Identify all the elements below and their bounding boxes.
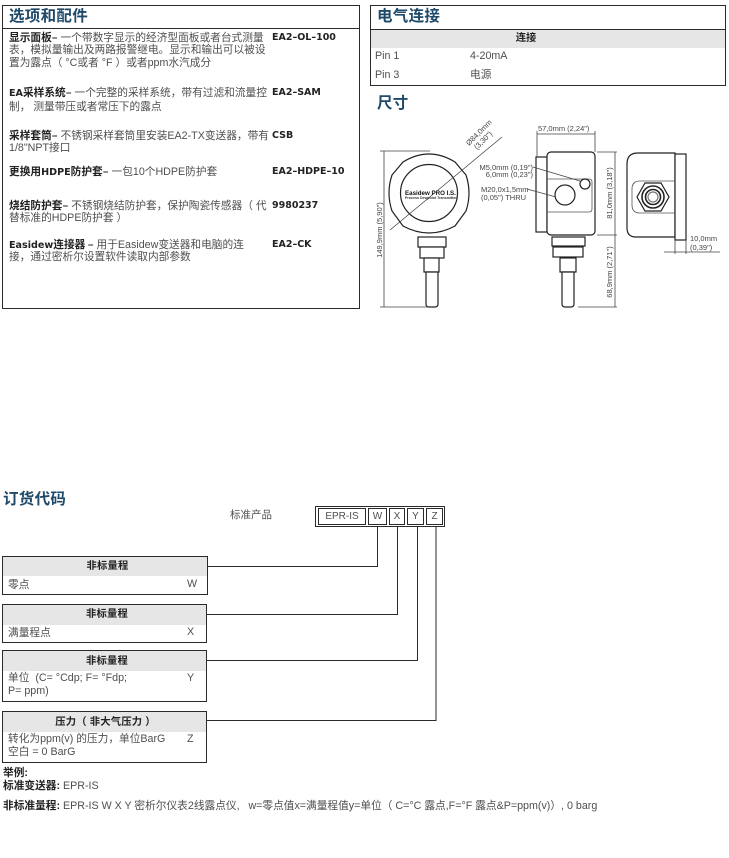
front view logo: Process Dewpoint Transmitter xyxy=(405,196,457,200)
option: sintered guard: 9980237 xyxy=(272,200,318,211)
option: Easidew connector: Easidew连接器 – 用于Easidew变送器和电脑的连 xyxy=(9,237,244,252)
front view dimensions: (3,30") xyxy=(472,129,495,151)
box title: 非标量程 xyxy=(86,656,128,667)
option: HDPE guard xyxy=(9,164,344,179)
option: sampling system: 制， 测量带压或者常压下的露点 xyxy=(9,101,162,113)
row: units: Y xyxy=(187,672,194,684)
rear view dimension: 10,0mm xyxy=(690,234,717,243)
box title xyxy=(3,712,206,732)
row: pin 1: 4-20mA xyxy=(470,50,507,62)
row: pressure xyxy=(8,732,194,758)
heading: dimensions: 尺寸 xyxy=(377,95,409,112)
option: sample block: 采样套筒– 不锈钢采样套筒里安装EA2-TX变送器，带有 xyxy=(9,128,269,143)
row: units: P= ppm) xyxy=(8,685,49,697)
code: Z xyxy=(426,508,443,525)
option: sintered guard: 烧结防护套– 不锈钢烧结防护套，保护陶瓷传感器（ 代 xyxy=(9,198,267,213)
option: display panel: 置为露点（ °C或者 °F ）或者ppm水汽成分 xyxy=(9,57,211,69)
heading: options and accessories: 选项和配件 xyxy=(9,8,88,25)
heading: ordering code: 订货代码 xyxy=(3,491,66,508)
option: HDPE guard: 更换用HDPE防护套– 一包10个HDPE防护套 xyxy=(9,164,217,179)
option: sampling system xyxy=(9,85,321,113)
row: pin 1 xyxy=(375,50,508,62)
side view dimensions: M5,0mm (0,19") xyxy=(479,163,533,172)
row: pin 3: 电源 xyxy=(470,69,491,81)
option: sampling system: EA采样系统– 一个完整的采样系统，带有过滤和流量控 xyxy=(9,85,267,100)
side view dimensions: 57,0mm (2,24") xyxy=(538,124,590,133)
row: full scale: X xyxy=(187,626,194,638)
option: sintered guard xyxy=(9,198,318,224)
side view dimensions xyxy=(479,124,617,307)
label: standard product: 标准产品 xyxy=(230,509,272,521)
box: zero point W xyxy=(2,556,208,595)
box: pressure Z xyxy=(2,711,207,763)
row: units: 单位 (C= °Cdp; F= °Fdp; xyxy=(8,672,127,684)
box title: 非标量程 xyxy=(86,561,128,572)
box title xyxy=(3,557,207,576)
code: EPR-IS xyxy=(318,508,366,525)
option: sample block: 1/8"NPT接口 xyxy=(9,142,70,154)
box title: 压力（ 非大气压力 ） xyxy=(55,717,156,728)
option: Easidew connector xyxy=(9,237,312,263)
example heading: 举例: xyxy=(3,767,28,779)
option: HDPE guard: EA2–HDPE–10 xyxy=(272,166,344,177)
code: Y xyxy=(407,508,424,525)
front view dimensions xyxy=(375,118,502,307)
option: display panel: 显示面板– 一个带数字显示的经济型面板或者台式测量 xyxy=(9,30,264,45)
row: zero: 零点 xyxy=(8,579,29,591)
front view logo xyxy=(405,190,457,200)
code: EPR-IS: EPR-IS xyxy=(325,511,359,522)
row: pressure: 转化为ppm(v) 的压力，单位BarG xyxy=(8,733,165,745)
panel: electrical connections xyxy=(370,5,726,86)
row: full scale: 满量程点 xyxy=(8,627,51,639)
side view dimensions: (0,05") THRU xyxy=(481,193,526,202)
code: W: W xyxy=(373,511,382,522)
box title: 非标量程 xyxy=(86,609,128,620)
front view dimensions: Ø84,0mm xyxy=(464,118,494,147)
divider under heading xyxy=(3,28,359,29)
code: Z: Z xyxy=(431,511,438,522)
option: Easidew connector: EA2–CK xyxy=(272,239,312,250)
option: sintered guard: 替标准的HDPE防护套 ） xyxy=(9,212,127,224)
box title xyxy=(3,605,206,625)
rear view xyxy=(627,153,686,240)
option: display panel: EA2–OL–100 xyxy=(272,32,336,43)
side view xyxy=(536,152,595,307)
connection table header: 连接 xyxy=(516,33,536,44)
box: units Y xyxy=(2,650,207,702)
order code boxes xyxy=(315,506,445,527)
option: sample block: CSB xyxy=(272,130,293,141)
connection table header xyxy=(371,29,725,48)
side view dimensions: 68,9mm (2,71") xyxy=(605,246,614,298)
code: W xyxy=(368,508,387,525)
option: sample block xyxy=(9,128,293,154)
row: pressure: Z xyxy=(187,733,194,745)
row: pressure: 空白 = 0 BarG xyxy=(8,746,75,758)
side view dimensions: 6,0mm (0,23") xyxy=(486,170,533,179)
front view dimensions: 149,9mm (5,90") xyxy=(375,202,384,258)
row: pin 3: Pin 3 xyxy=(375,69,399,81)
row: zero: W xyxy=(187,578,197,590)
rear view dimension xyxy=(664,234,720,254)
code: X xyxy=(389,508,405,525)
panel: options and accessories xyxy=(2,5,360,309)
row: units xyxy=(8,672,194,697)
side view dimensions: M20,0x1,5mm xyxy=(481,185,529,194)
code: Y: Y xyxy=(412,511,419,522)
option: display panel xyxy=(9,30,336,69)
row: pin 3 xyxy=(375,68,491,81)
example: non-standard: 非标准量程: EPR-IS W X Y 密析尔仪表2线露点仪, w=零点值x=满量程值y=单位（ C=°C 露点,F=°F 露点&P=ppm(v)）, 0 barg xyxy=(3,800,597,812)
code: X: X xyxy=(394,511,400,522)
front view xyxy=(389,154,469,307)
row: zero xyxy=(8,578,197,591)
option: display panel: 表，模拟量输出及两路报警继电。显示和输出可以被设 xyxy=(9,44,266,56)
rear view dimension: (0,39") xyxy=(690,243,713,252)
example: standard: 标准变送器: EPR-IS xyxy=(3,780,99,792)
row: full scale xyxy=(8,626,194,639)
box title xyxy=(3,651,206,671)
row: pin 1: Pin 1 xyxy=(375,50,399,62)
side view dimensions: 81,0mm (3,18") xyxy=(605,167,614,219)
option: sampling system: EA2–SAM xyxy=(272,87,321,98)
front view logo: Easidew PRO I.S. xyxy=(405,190,456,197)
option: Easidew connector: 接，通过密析尔设置软件读取内部参数 xyxy=(9,251,191,263)
box: full scale X xyxy=(2,604,207,643)
examples text xyxy=(3,766,597,812)
heading: electrical connections: 电气连接 xyxy=(377,8,440,25)
